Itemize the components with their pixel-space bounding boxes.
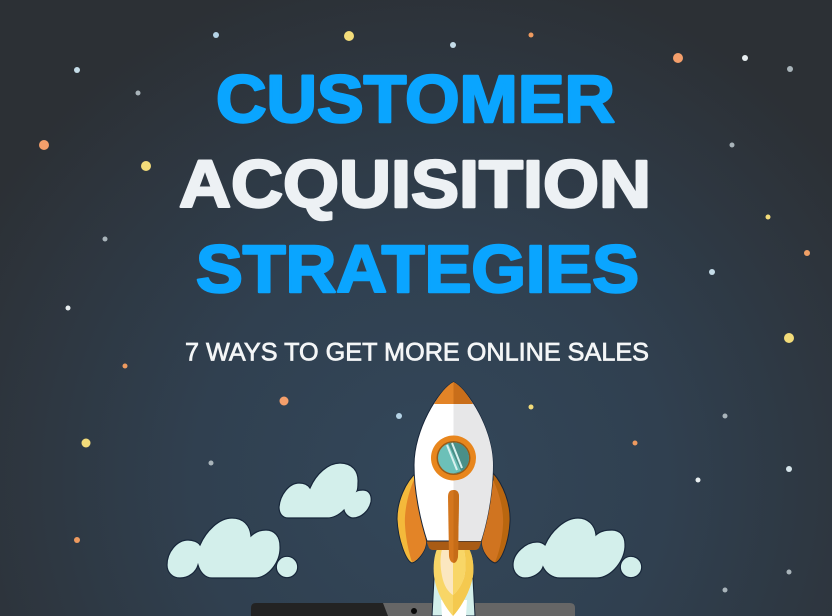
title line: CUSTOMER: CUSTOMER (216, 62, 615, 137)
rocket window (431, 436, 476, 480)
laptop (251, 603, 575, 616)
left fin (397, 472, 426, 563)
title (179, 62, 651, 307)
laptop camera (411, 608, 417, 614)
cloud: lower left puff (276, 556, 298, 578)
right fin (482, 473, 510, 563)
cloud: lower left (167, 518, 280, 578)
rocket exhaust (432, 560, 475, 616)
rocket body (414, 382, 493, 541)
rocket center fin (448, 490, 459, 563)
rocket base (426, 540, 482, 550)
cloud: lower right (513, 518, 625, 578)
laptop screen dark side (251, 603, 388, 616)
title line: ACQUISITION: ACQUISITION (179, 147, 651, 222)
clouds (167, 463, 642, 578)
cloud: upper (279, 463, 371, 518)
rocket nose (434, 382, 473, 404)
rocket flame (434, 549, 473, 616)
cloud: lower right puff (620, 556, 642, 578)
title line: STRATEGIES: STRATEGIES (196, 232, 639, 307)
subtitle: 7 WAYS TO GET MORE ONLINE SALES (185, 338, 649, 366)
icon: rocket (397, 382, 510, 616)
laptop screen light side (380, 603, 575, 616)
